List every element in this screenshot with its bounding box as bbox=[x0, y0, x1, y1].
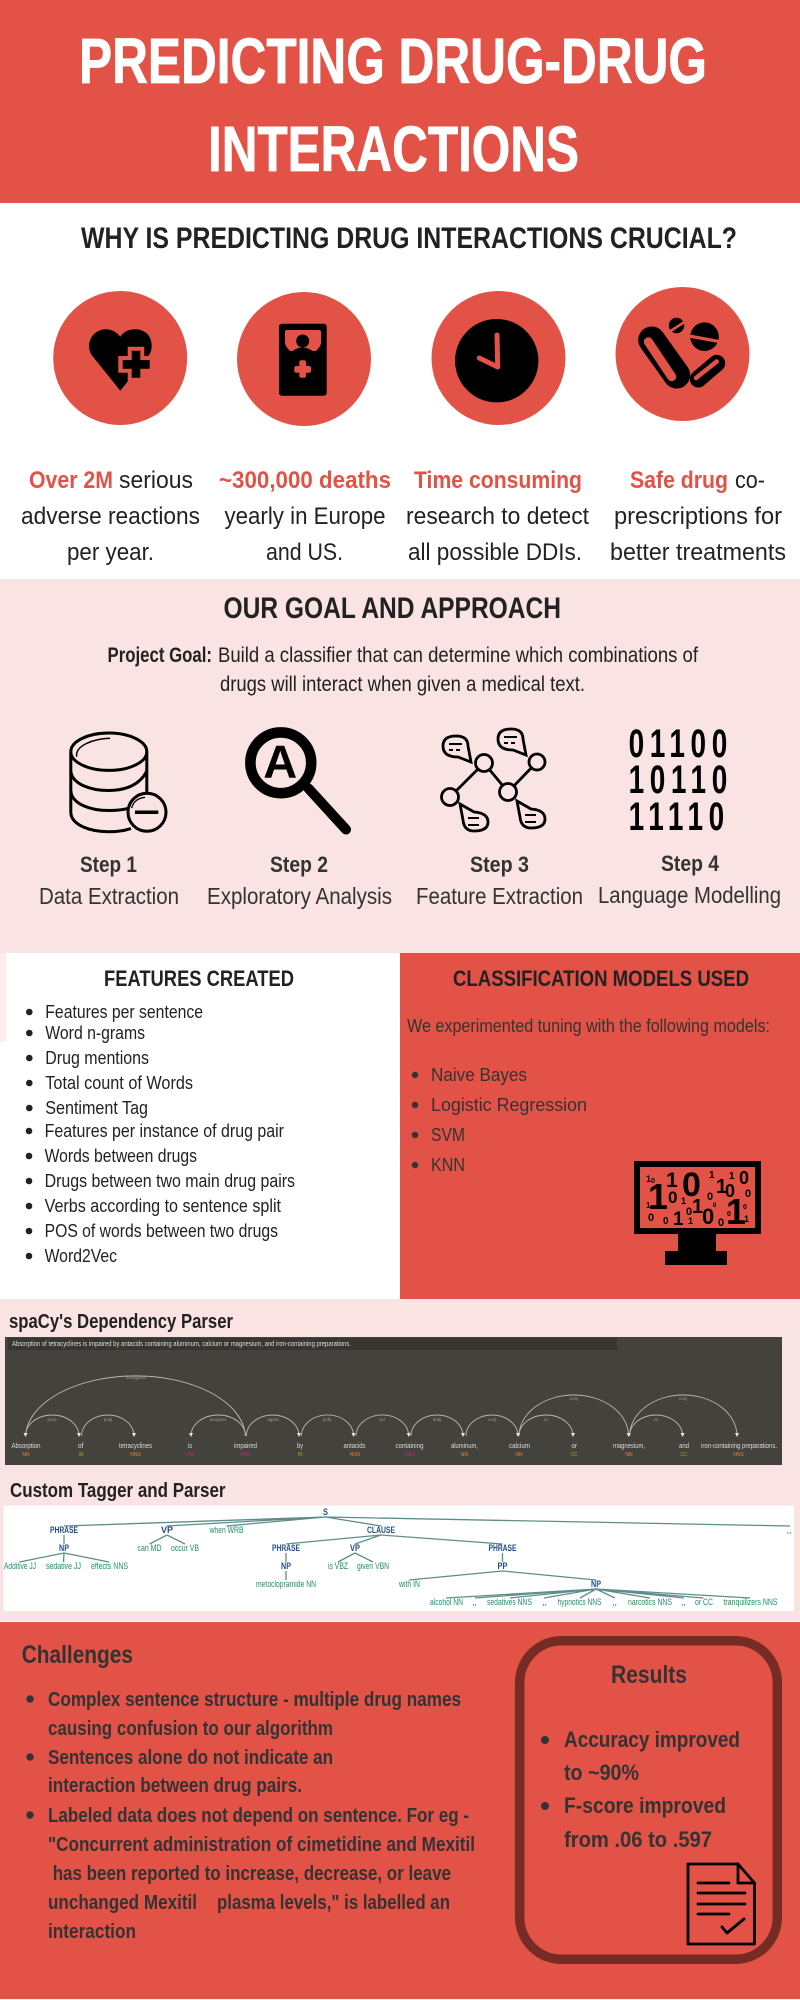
list: features: Drugs between two main drug pairs bbox=[45, 1171, 295, 1191]
chart: dependency parse: pobj bbox=[323, 1417, 331, 1422]
list: features: Drug mentions bbox=[45, 1048, 149, 1068]
chart: parse tree: alcohol NN bbox=[430, 1597, 463, 1608]
list: models: Logistic Regression bbox=[431, 1095, 587, 1115]
chart: dependency parse: magnesium, bbox=[613, 1441, 645, 1450]
text: deaths: yearly in Europe bbox=[224, 503, 386, 530]
list: features: Features per sentence bbox=[45, 1002, 203, 1022]
chart: dependency parse: or bbox=[572, 1441, 577, 1450]
text: project goal: drugs will interact when given a medical text. bbox=[220, 673, 585, 696]
icon: monitor with binary: 0 bbox=[702, 1204, 714, 1229]
icon: monitor with binary: 0 bbox=[725, 1181, 735, 1201]
chart: dependency parse: conj bbox=[570, 1396, 578, 1401]
icon: monitor with binary: 0 bbox=[739, 1168, 749, 1188]
icon: monitor with binary: 0 bbox=[743, 1204, 747, 1211]
icon: binary: 01100 bbox=[629, 722, 733, 766]
chart: parse tree: with IN bbox=[398, 1579, 420, 1590]
heading: models: CLASSIFICATION MODELS USED bbox=[453, 966, 749, 991]
chart: dependency parse bbox=[5, 1337, 782, 1465]
heading: custom tagger: Custom Tagger and Parser bbox=[10, 1480, 226, 1502]
chart: dependency parse: is bbox=[188, 1441, 192, 1450]
chart: parse tree: is VBZ bbox=[328, 1561, 348, 1572]
icon: monitor with binary: 0 bbox=[727, 1211, 731, 1218]
text: deaths: ~300,000 deaths bbox=[219, 467, 391, 494]
chart: dependency parse: calcium bbox=[509, 1441, 530, 1450]
chart: dependency parse: NNS bbox=[130, 1452, 141, 1458]
icon: monitor with binary: 1 bbox=[744, 1214, 749, 1224]
step 3: Step 3 bbox=[470, 852, 529, 877]
step 1 bbox=[39, 852, 179, 909]
heading: challenges: Challenges bbox=[22, 1641, 133, 1669]
panel: results bbox=[520, 1641, 777, 1959]
chart: parse tree: VP bbox=[161, 1525, 174, 1536]
chart: dependency parse: conj bbox=[679, 1396, 687, 1401]
chart: dependency parse: impaired bbox=[234, 1441, 257, 1450]
chart: dependency parse: tetracyclines bbox=[119, 1441, 152, 1450]
chart: parse tree: occur VB bbox=[171, 1543, 199, 1554]
icon: hospital bed bbox=[237, 292, 371, 426]
step 1: Data Extraction bbox=[39, 883, 179, 909]
icon: database bbox=[71, 733, 166, 832]
panel: features created bbox=[0, 953, 295, 1266]
text: safe drug: Safe drug bbox=[630, 467, 728, 494]
chart: parse tree: sedatives NNS bbox=[487, 1597, 532, 1608]
text: over 2M: adverse reactions bbox=[21, 503, 200, 530]
chart: parse tree: tranquilizers NNS bbox=[724, 1597, 778, 1608]
chart: parse tree: or CC bbox=[695, 1597, 713, 1608]
chart: dependency parse: iron-containing preparations. bbox=[701, 1441, 777, 1450]
icon: monitor with binary: 1 bbox=[681, 1196, 686, 1206]
chart: parse tree: given VBN bbox=[357, 1561, 389, 1572]
list: results bbox=[541, 1727, 740, 1852]
chart: parse tree: NP bbox=[591, 1579, 601, 1590]
list: results: to ~90% bbox=[564, 1760, 639, 1785]
chart: parse tree: NP bbox=[281, 1561, 291, 1572]
chart: dependency parse: nsubjpass bbox=[126, 1375, 147, 1380]
text: over 2M bbox=[21, 467, 200, 566]
chart: dependency parse: VBG bbox=[405, 1452, 415, 1458]
chart: dependency parse: NN bbox=[515, 1452, 523, 1458]
chart: dependency parse: of bbox=[78, 1441, 84, 1450]
icon: monitor with binary: 1 bbox=[673, 1209, 684, 1230]
icon: monitor with binary: 0 bbox=[682, 1166, 701, 1204]
icon: monitor with binary: 0 bbox=[648, 1212, 654, 1224]
step 3 bbox=[416, 852, 583, 909]
list: models: SVM bbox=[431, 1125, 465, 1145]
panel: classification models bbox=[400, 953, 800, 1299]
icon: pills bbox=[616, 287, 750, 421]
heading: spacy parser: spaCy's Dependency Parser bbox=[9, 1311, 233, 1333]
icon: monitor with binary: 1 bbox=[646, 1201, 651, 1210]
chart: dependency parse: Absorption bbox=[12, 1441, 40, 1450]
title bbox=[79, 25, 707, 185]
list: challenges: Labeled data does not depend on sentence. For eg - bbox=[48, 1805, 469, 1827]
list: features: Sentiment Tag bbox=[45, 1098, 148, 1118]
text: time consuming: all possible DDIs. bbox=[408, 539, 582, 566]
list: challenges: has been reported to increase, decrease, or leave bbox=[53, 1863, 451, 1885]
chart: parse tree: sedative JJ bbox=[46, 1561, 81, 1572]
step 4 bbox=[598, 851, 781, 908]
chart: dependency parse: acl bbox=[379, 1417, 385, 1422]
icon: monitor with binary: 1 bbox=[716, 1176, 727, 1198]
list: models bbox=[412, 1065, 587, 1175]
list: results: from .06 to .597 bbox=[564, 1827, 712, 1852]
chart: dependency parse: IN bbox=[298, 1452, 303, 1458]
icon: monitor with binary: 1 bbox=[729, 1171, 735, 1182]
chart: dependency parse: NN bbox=[625, 1452, 633, 1458]
heading: goal: OUR GOAL AND APPROACH bbox=[224, 592, 561, 625]
chart: dependency parse: antacids bbox=[344, 1441, 366, 1450]
chart: parse tree: Additive JJ bbox=[4, 1561, 36, 1572]
chart: dependency parse: NNS bbox=[733, 1452, 744, 1458]
chart: dependency parse: agent bbox=[267, 1417, 279, 1422]
heading: features: FEATURES CREATED bbox=[104, 966, 294, 991]
text: over 2M: per year. bbox=[67, 539, 154, 566]
list: challenges: causing confusion to our algorithm bbox=[48, 1718, 333, 1740]
list: features: Features per instance of drug pair bbox=[45, 1121, 284, 1141]
list: features: Words between drugs bbox=[45, 1146, 197, 1166]
chart: parse tree: CLAUSE bbox=[367, 1525, 395, 1536]
chart: parse tree: S bbox=[323, 1507, 328, 1518]
list: features bbox=[26, 1002, 295, 1266]
heading: results: Results bbox=[611, 1661, 687, 1689]
chart: parse tree: , , bbox=[542, 1597, 547, 1608]
icon: monitor with binary: 1 bbox=[692, 1196, 703, 1218]
panel: parsers bbox=[0, 1299, 800, 1621]
chart: dependency parse: containing bbox=[396, 1441, 424, 1450]
chart: dependency parse: CC bbox=[570, 1452, 578, 1458]
list: models: KNN bbox=[431, 1155, 465, 1175]
text: over 2M: Over 2M bbox=[29, 467, 113, 494]
chart: dependency parse: by bbox=[297, 1441, 303, 1450]
icon: binary: 11110 bbox=[629, 795, 730, 839]
icon: network bbox=[442, 729, 545, 831]
header banner bbox=[0, 0, 800, 203]
list: features: Verbs according to sentence split bbox=[45, 1196, 281, 1216]
icon: magnifier: A bbox=[263, 735, 297, 787]
list: challenges: Sentences alone do not indicate an bbox=[48, 1747, 333, 1769]
text: project goal: Build a classifier that can determine which combinations of bbox=[218, 644, 698, 667]
icon: monitor with binary: 0 bbox=[663, 1216, 669, 1227]
icon: monitor with binary: 1 bbox=[726, 1191, 746, 1232]
icon: magnifier bbox=[250, 732, 346, 830]
icon: monitor with binary: 0 bbox=[686, 1206, 692, 1218]
icon: monitor with binary: 0 bbox=[651, 1178, 655, 1185]
chart: parse tree: VP bbox=[350, 1543, 361, 1554]
chart: parse tree: can MD bbox=[138, 1543, 162, 1554]
text: deaths bbox=[219, 467, 391, 566]
icon: binary bbox=[629, 722, 733, 839]
chart: parse tree: , , bbox=[472, 1597, 477, 1608]
chart: parse tree: when WRB bbox=[209, 1525, 244, 1536]
icon: monitor with binary bbox=[637, 1164, 758, 1265]
text: safe drug bbox=[610, 467, 786, 566]
chart: parse tree: hypnotics NNS bbox=[558, 1597, 602, 1608]
list: challenges: plasma levels," is labelled an bbox=[217, 1892, 450, 1914]
icon: monitor with binary: 1 bbox=[709, 1170, 715, 1181]
icon: monitor with binary: 1 bbox=[688, 1216, 693, 1226]
text: over 2M: serious bbox=[119, 467, 193, 494]
chart: dependency parse: VBZ bbox=[185, 1452, 195, 1458]
chart: dependency parse: Absorption of tetracyclines is impaired by antacids containing aluminum, calcium or magnesium, and iron-containing preparations. bbox=[12, 1341, 351, 1348]
step 4: Language Modelling bbox=[598, 882, 781, 908]
chart: dependency parse: VBN bbox=[240, 1452, 251, 1458]
text: project goal: Project Goal: bbox=[108, 644, 212, 667]
list: results: Accuracy improved bbox=[564, 1727, 740, 1752]
list: results: F-score improved bbox=[564, 1793, 726, 1818]
step 3: Feature Extraction bbox=[416, 883, 583, 909]
text: time consuming: research to detect bbox=[406, 503, 589, 530]
chart: parse tree: effects NNS bbox=[91, 1561, 128, 1572]
text: deaths: and US. bbox=[266, 539, 343, 566]
list: challenges: "Concurrent administration of cimetidine and Mexitil bbox=[48, 1834, 475, 1856]
chart: parse tree: PHRASE bbox=[50, 1525, 78, 1536]
icon: monitor with binary: 0 bbox=[668, 1188, 677, 1207]
panel: goal and approach bbox=[0, 579, 800, 953]
chart: parse tree: narcotics NNS bbox=[628, 1597, 672, 1608]
icon: binary: 10110 bbox=[629, 758, 733, 802]
icon: clock bbox=[432, 291, 566, 425]
icon: monitor with binary: 1 bbox=[646, 1174, 651, 1184]
text: project goal bbox=[108, 644, 698, 696]
chart: dependency parse: pobj bbox=[104, 1417, 112, 1422]
chart: parse tree: PP bbox=[498, 1561, 508, 1572]
chart: parse tree: metoclopramide NN bbox=[256, 1579, 316, 1590]
list: features: Total count of Words bbox=[45, 1073, 193, 1093]
chart: dependency parse: aluminum, bbox=[451, 1441, 478, 1450]
panel: challenges and results bbox=[0, 1622, 800, 1999]
chart: parse tree: , , bbox=[612, 1597, 617, 1608]
text: time consuming bbox=[406, 467, 589, 566]
icon: monitor with binary: 0 bbox=[745, 1188, 751, 1200]
step 2: Step 2 bbox=[270, 852, 328, 877]
title: INTERACTIONS bbox=[208, 113, 579, 185]
chart: parse tree: PHRASE bbox=[272, 1543, 300, 1554]
icon: monitor with binary: 0 bbox=[718, 1217, 724, 1229]
text: safe drug: better treatments bbox=[610, 539, 786, 566]
icon: monitor with binary: 0 bbox=[713, 1203, 717, 1209]
text: safe drug: co- bbox=[735, 467, 765, 494]
list: challenges: Complex sentence structure - multiple drug names bbox=[48, 1689, 461, 1711]
icon: monitor with binary: 1 bbox=[666, 1169, 678, 1192]
step 2: Exploratory Analysis bbox=[207, 883, 392, 909]
chart: parse tree: , , bbox=[681, 1597, 686, 1608]
icon: monitor with binary: 1 bbox=[648, 1176, 668, 1217]
list: features: POS of words between two drugs bbox=[45, 1221, 278, 1241]
chart: dependency parse: and bbox=[679, 1441, 689, 1450]
chart: dependency parse: NN bbox=[22, 1452, 30, 1458]
chart: parse tree: , , bbox=[786, 1525, 792, 1536]
step 4: Step 4 bbox=[661, 851, 720, 876]
chart: dependency parse: dobj bbox=[433, 1417, 441, 1422]
chart: dependency parse: conj bbox=[488, 1417, 496, 1422]
chart: dependency parse: auxpass bbox=[210, 1417, 227, 1422]
chart: dependency parse: NNS bbox=[350, 1452, 361, 1458]
chart: dependency parse: prep bbox=[47, 1417, 57, 1422]
icon: monitor with binary: 0 bbox=[707, 1191, 713, 1203]
list: challenges bbox=[26, 1689, 475, 1943]
list: features: Word2Vec bbox=[45, 1246, 117, 1266]
step 1: Step 1 bbox=[80, 852, 137, 877]
list: challenges: unchanged Mexitil bbox=[48, 1892, 197, 1914]
chart: dependency parse: CC bbox=[680, 1452, 688, 1458]
chart: dependency parse: cc bbox=[654, 1417, 659, 1422]
chart: dependency parse: cc bbox=[544, 1417, 549, 1422]
icon: document with check bbox=[688, 1864, 754, 1944]
text: time consuming: Time consuming bbox=[414, 467, 582, 494]
step 2 bbox=[207, 852, 392, 909]
list: features: Word n-grams bbox=[45, 1023, 145, 1043]
list: challenges: interaction between drug pairs. bbox=[48, 1775, 302, 1797]
chart: parse tree: NP bbox=[59, 1543, 69, 1554]
chart: parse tree: PHRASE bbox=[488, 1543, 516, 1554]
text: safe drug: prescriptions for bbox=[614, 503, 782, 530]
chart: dependency parse: NN bbox=[461, 1452, 468, 1458]
chart: parse tree bbox=[4, 1506, 794, 1611]
chart: dependency parse: IN bbox=[78, 1452, 84, 1458]
list: challenges: interaction bbox=[48, 1921, 136, 1943]
list: models: Naive Bayes bbox=[431, 1065, 527, 1085]
icon: heart with cross bbox=[53, 291, 187, 425]
